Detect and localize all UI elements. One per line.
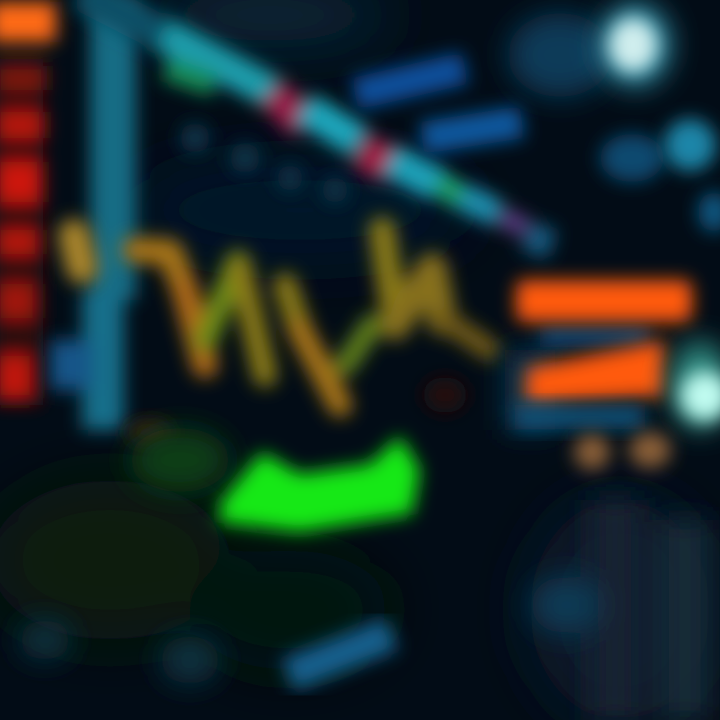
tan markers — [574, 432, 671, 470]
chart: zigzag price line — [74, 230, 490, 405]
panel: orange bars — [505, 280, 692, 430]
chart: diagonal segmented line — [80, 0, 552, 245]
bar: lower orange — [526, 340, 664, 404]
panel: left red column — [0, 2, 56, 405]
panel: bright green block — [130, 428, 420, 532]
chart gridline dots — [180, 123, 348, 203]
legend: blue bars — [355, 68, 522, 138]
icon group: top right blobs — [508, 3, 720, 232]
red stripes — [0, 60, 43, 405]
bar: upper orange — [516, 280, 692, 322]
icon: orange corner block — [0, 2, 56, 42]
lower left dim marks — [19, 620, 220, 684]
blue bar lower — [288, 634, 392, 675]
lower right dark columns — [531, 500, 710, 720]
icon: glowing cyan blob — [670, 341, 720, 429]
dim orange marker — [126, 420, 174, 444]
chart axis: vertical teal bar — [50, 0, 136, 430]
dark red marker — [423, 377, 467, 413]
